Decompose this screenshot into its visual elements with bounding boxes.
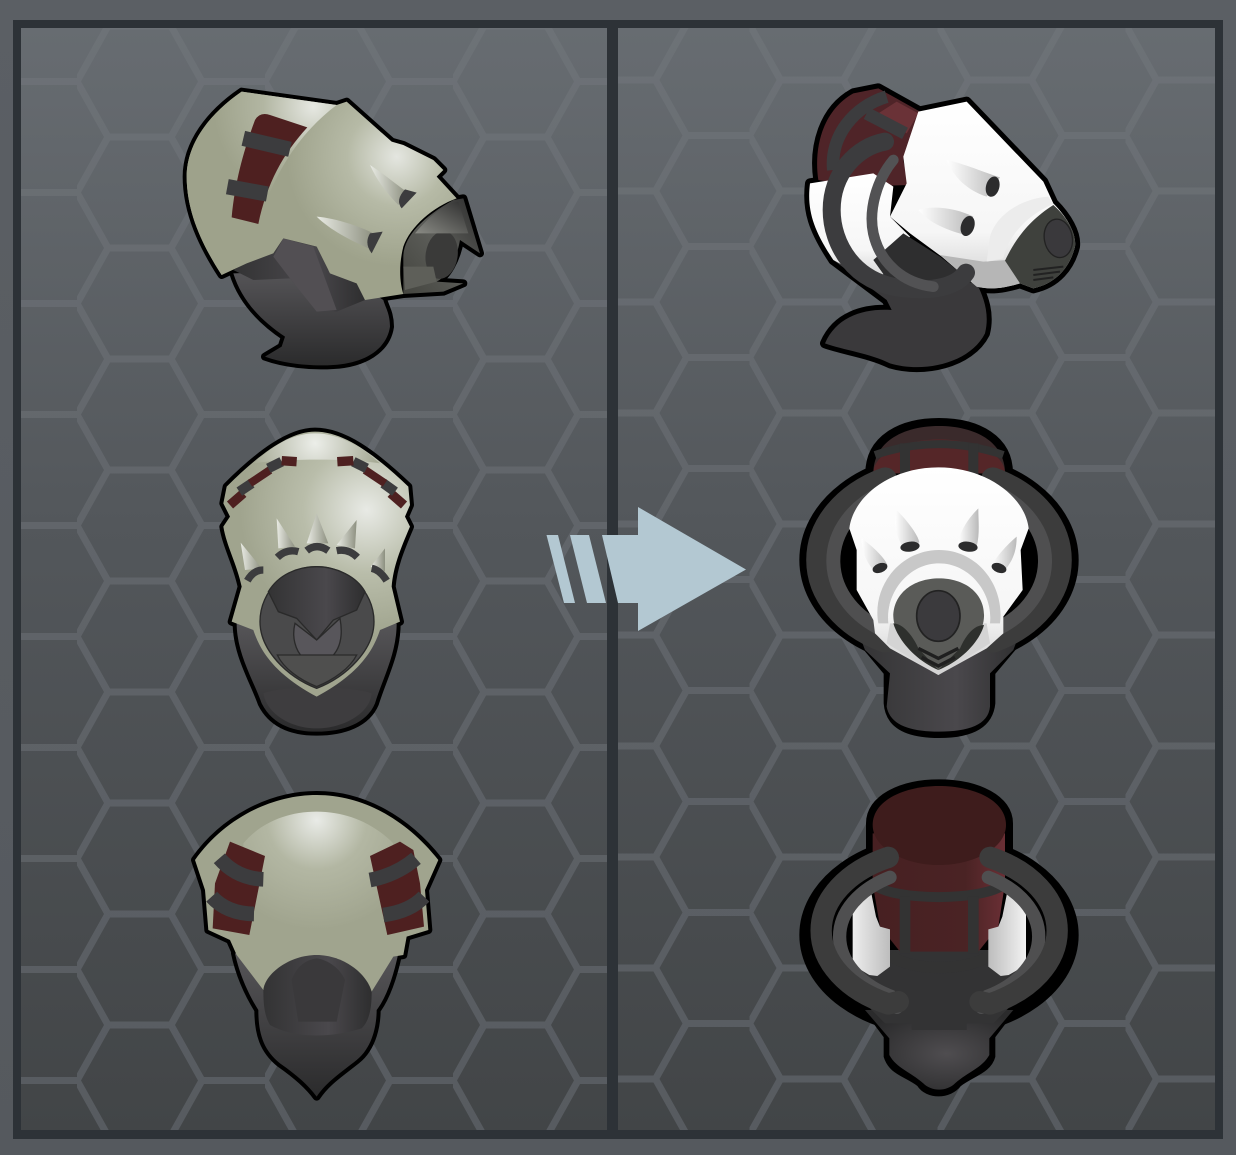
icon: original helmet, rear view xyxy=(195,795,438,1097)
icon: redesigned helmet, front view xyxy=(801,419,1077,737)
panel: after xyxy=(618,28,1215,1130)
panel: before xyxy=(21,28,607,1130)
arrow: before to after xyxy=(546,507,746,631)
icon: redesigned helmet, rear view xyxy=(801,781,1077,1095)
icon: original helmet, three-quarter view xyxy=(187,92,480,365)
icon: original helmet, front view xyxy=(223,432,410,732)
icon: redesigned helmet, three-quarter view xyxy=(809,88,1075,367)
